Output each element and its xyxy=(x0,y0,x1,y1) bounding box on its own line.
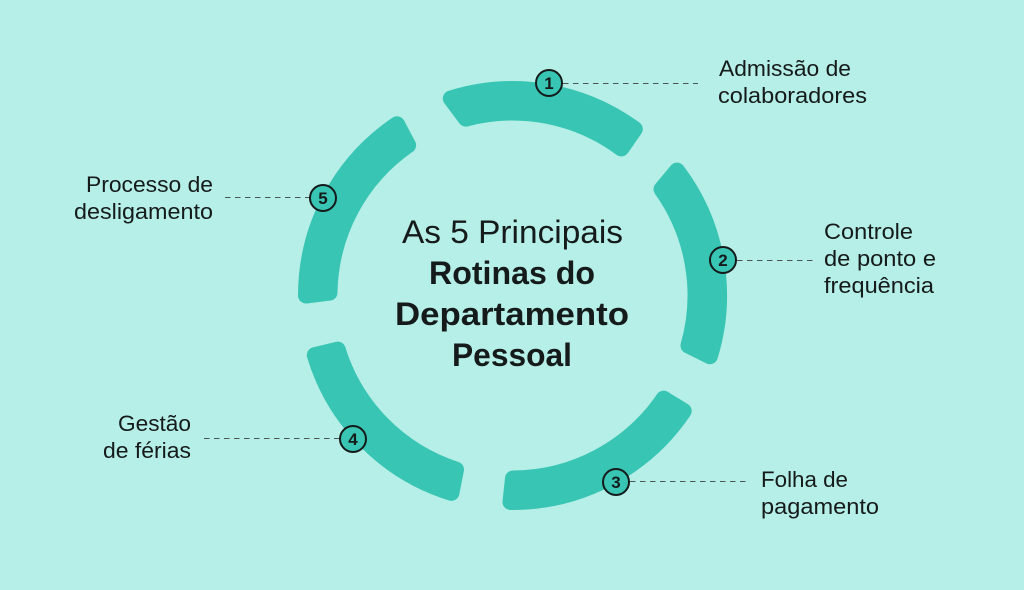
label 2: Controle xyxy=(824,219,913,244)
label 3: Folha de xyxy=(761,467,848,492)
ring of five arc segments xyxy=(306,89,719,502)
label 3: pagamento xyxy=(761,494,879,519)
label 5: Processo de xyxy=(86,172,213,197)
label 5 xyxy=(74,172,213,224)
number badge 4 xyxy=(340,426,366,452)
center title xyxy=(395,214,629,373)
title line: Departamento: Departamento xyxy=(395,296,629,332)
label 1: Admissão de xyxy=(719,56,851,81)
connector 1 xyxy=(563,82,698,84)
arc segment 4 xyxy=(315,350,456,493)
label 2: de ponto e xyxy=(824,246,936,271)
step 2: Controle de ponto e frequência xyxy=(710,219,936,298)
arc segment 5 xyxy=(306,124,408,296)
number badge 3 xyxy=(603,469,629,495)
number badge 1 xyxy=(536,70,562,96)
connector 2 xyxy=(737,260,815,262)
label 4 xyxy=(103,411,191,463)
title line: Rotinas do: Rotinas do xyxy=(429,255,595,291)
number badge 1: 1 xyxy=(544,74,554,93)
label 1: colaboradores xyxy=(718,83,867,108)
arc segment 3 xyxy=(510,399,684,502)
arc segment 2 xyxy=(662,171,719,356)
label 3 xyxy=(761,467,879,519)
label 4: de férias xyxy=(103,438,191,463)
step 1: Admissão de colaboradores xyxy=(536,56,867,108)
number badge 4: 4 xyxy=(348,430,358,449)
label 2 xyxy=(824,219,936,298)
number badge 5 xyxy=(310,185,336,211)
arc segment 1 xyxy=(451,89,635,148)
label 1 xyxy=(718,56,867,108)
number badge 3: 3 xyxy=(611,473,621,492)
step 5: Processo de desligamento xyxy=(74,172,336,224)
number badge 2: 2 xyxy=(718,251,728,270)
title line: Pessoal: Pessoal xyxy=(452,337,572,373)
step 4: Gestão de férias xyxy=(103,411,366,463)
connector 5 xyxy=(225,196,310,198)
connector 4 xyxy=(204,438,340,440)
number badge 2 xyxy=(710,247,736,273)
connector 3 xyxy=(630,480,748,482)
label 5: desligamento xyxy=(74,199,213,224)
step 3: Folha de pagamento xyxy=(603,467,879,519)
label 2: frequência xyxy=(824,273,935,298)
title line: As 5 Principais: As 5 Principais xyxy=(402,214,623,250)
number badge 5: 5 xyxy=(318,189,328,208)
label 4: Gestão xyxy=(118,411,191,436)
